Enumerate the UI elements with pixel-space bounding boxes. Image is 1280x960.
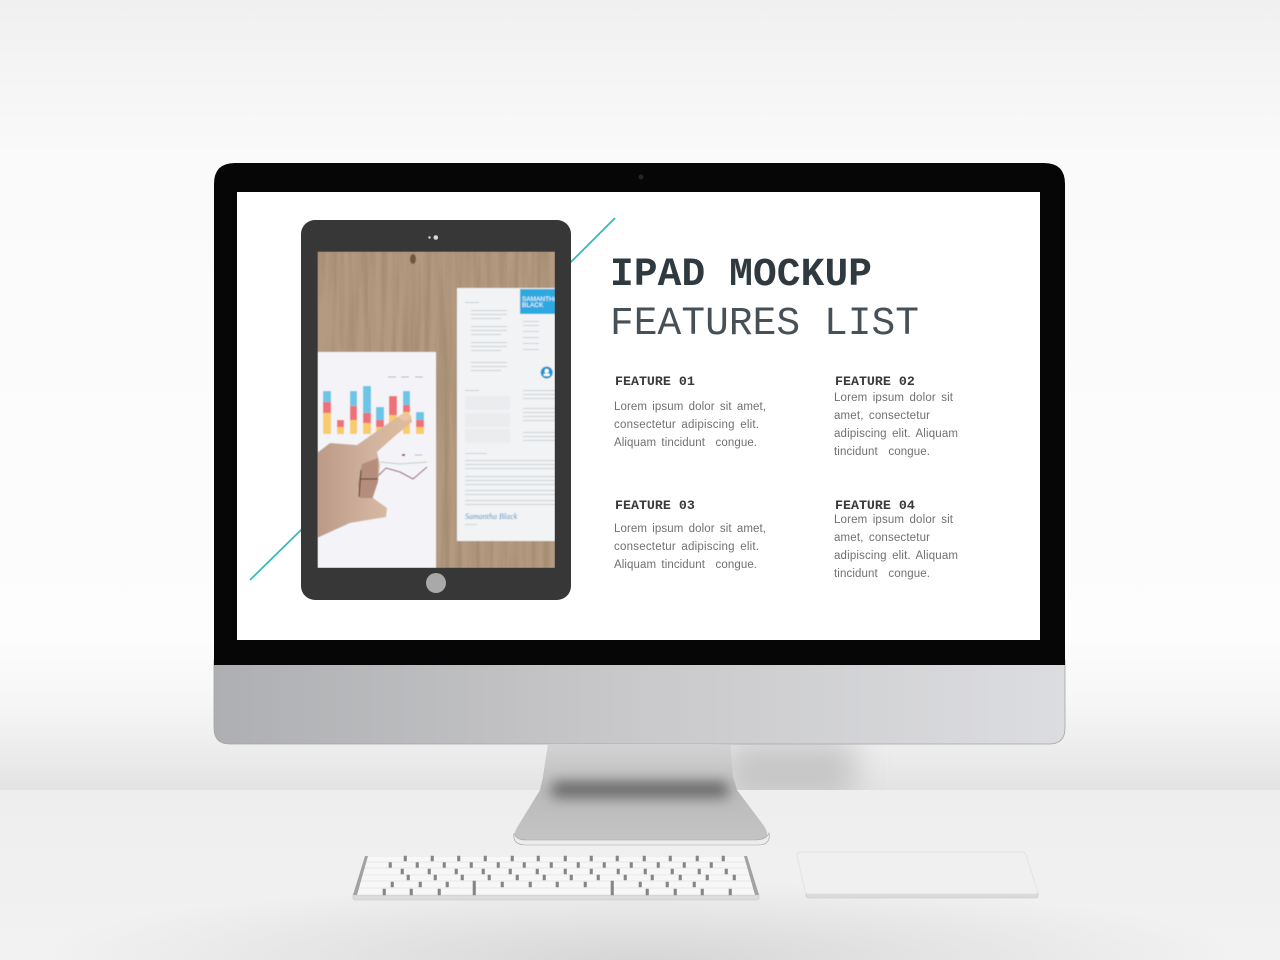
key gaps	[383, 856, 736, 895]
heading	[610, 252, 919, 346]
feature 03 body: Aliquam tincidunt congue.	[614, 559, 757, 571]
keyboard edges	[353, 856, 759, 895]
tablet home button	[426, 573, 446, 593]
line chart	[378, 462, 427, 479]
desk shading	[40, 800, 1240, 960]
feature 01 body: consectetur adipiscing elit.	[614, 419, 759, 431]
tablet camera	[428, 235, 438, 240]
feature 01 body	[614, 401, 766, 449]
feature 03	[614, 498, 766, 571]
stacked bar chart	[323, 386, 424, 434]
monitor bezel	[214, 163, 1065, 665]
stand body	[515, 745, 767, 841]
key rows	[356, 857, 756, 894]
feature 04 body: Lorem ipsum dolor sit	[834, 514, 954, 526]
feature 03 heading: FEATURE 03	[615, 498, 695, 513]
diagonal accent line	[250, 218, 615, 580]
background: desk	[0, 790, 1280, 960]
feature 02 body: Lorem ipsum dolor sit	[834, 392, 954, 404]
right resume sheet: BLACK	[522, 302, 544, 309]
feature 04 body: tincidunt congue.	[834, 568, 930, 580]
tablet body	[301, 220, 571, 600]
wood desk	[318, 252, 555, 568]
resume avatar icon	[541, 366, 553, 378]
feature 02 body: adipiscing elit. Aliquam	[834, 428, 958, 440]
resume name: SAMANTHA	[522, 296, 559, 303]
screen	[237, 192, 1040, 640]
feature 02 body	[834, 392, 958, 458]
feature 01	[614, 374, 766, 449]
feature 01 body: Aliquam tincidunt congue.	[614, 437, 757, 449]
trackpad rim	[806, 893, 1038, 898]
right resume sheet	[457, 288, 559, 541]
feature 01 body: Lorem ipsum dolor sit amet,	[614, 401, 766, 413]
feature 02 body: amet, consectetur	[834, 410, 930, 422]
feature 03 body: consectetur adipiscing elit.	[614, 541, 759, 553]
trackpad	[797, 852, 1038, 898]
monitor	[214, 163, 1065, 744]
keyboard top	[353, 856, 759, 895]
feature 04 body: adipiscing elit. Aliquam	[834, 550, 958, 562]
keyboard rim	[353, 895, 759, 900]
left sheet with charts	[318, 352, 436, 568]
feature 02 heading: FEATURE 02	[835, 374, 915, 389]
pointing hand	[317, 414, 412, 538]
feature 02 body: tincidunt congue.	[834, 446, 930, 458]
resume text lines	[465, 302, 555, 525]
feature 04	[834, 498, 958, 580]
monitor stand	[514, 745, 769, 845]
resume header	[520, 289, 555, 314]
monitor chin	[214, 660, 1065, 744]
wood knot	[410, 254, 416, 264]
feature 02	[834, 374, 958, 458]
chart legend	[388, 376, 423, 456]
stand shadow band	[552, 782, 728, 797]
stand base rim	[514, 833, 769, 845]
webcam	[638, 174, 644, 180]
trackpad surface	[797, 852, 1038, 894]
monitor shadow on wall	[725, 740, 855, 800]
feature 04 heading: FEATURE 04	[835, 498, 915, 513]
keyboard	[353, 856, 759, 900]
resume signature: Samantha Black	[465, 512, 518, 521]
feature 03 body: Lorem ipsum dolor sit amet,	[614, 523, 766, 535]
feature 03 body	[614, 523, 766, 571]
title line 2: FEATURES LIST	[610, 301, 919, 346]
title line 1: IPAD MOCKUP	[610, 252, 872, 297]
stand neck	[542, 745, 735, 790]
tablet photo	[317, 252, 559, 568]
tablet	[301, 220, 571, 600]
feature 04 body: amet, consectetur	[834, 532, 930, 544]
feature 01 heading: FEATURE 01	[615, 374, 695, 389]
feature 04 body	[834, 514, 958, 580]
wood grain	[318, 252, 555, 568]
